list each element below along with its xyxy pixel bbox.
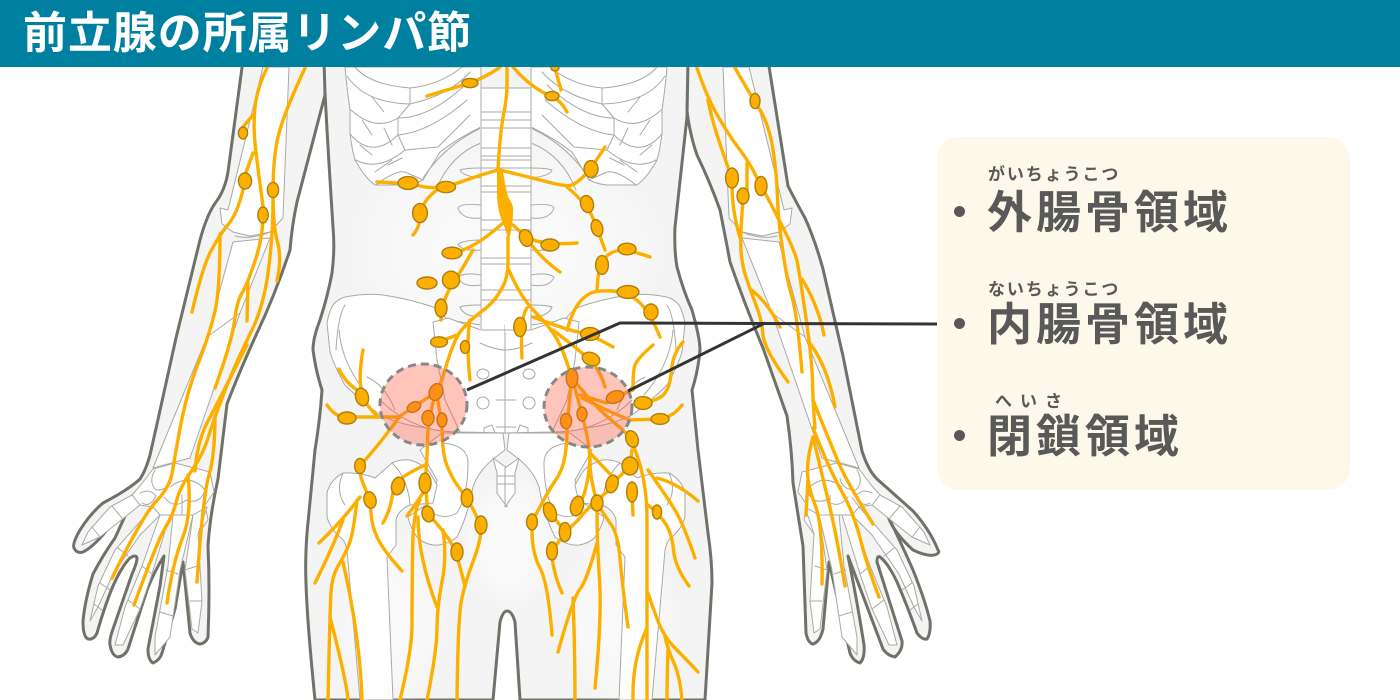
soft highlights on body: [330, 120, 680, 700]
panel: region list: [937, 137, 1350, 490]
title: 前立腺の所属リンパ節: [23, 9, 472, 58]
leader line: right region to label: [628, 323, 765, 391]
leader line: left region to label: [467, 323, 937, 390]
furigana: obturator: へいさ: [995, 392, 1070, 411]
bullet: [954, 318, 965, 329]
body silhouette: [74, 60, 939, 700]
highlighted region: right pelvic: [544, 367, 632, 447]
title bar: [0, 0, 1400, 67]
left arm lymph vessels and nodes: [112, 68, 305, 605]
label: internal iliac region: 内腸骨領域: [987, 298, 1232, 350]
left pelvic lymph vessels and nodes: [315, 350, 487, 700]
furigana: internal iliac: ないちょうこつ: [988, 280, 1120, 299]
furigana: external iliac: がいちょうこつ: [988, 165, 1120, 184]
torso lymph vessels and nodes: [377, 65, 660, 387]
list item: external iliac region: [954, 165, 1232, 238]
right pelvic lymph vessels and nodes: [527, 342, 698, 700]
bullet: [954, 430, 965, 441]
skeleton left half: [82, 67, 507, 700]
label: obturator region: 閉鎖領域: [987, 411, 1183, 462]
right arm lymph vessels and nodes: [697, 68, 879, 597]
list item: internal iliac region: [954, 280, 1232, 350]
highlighted region: left pelvic: [380, 364, 467, 445]
label: external iliac region: 外腸骨領域: [987, 186, 1232, 238]
skeleton right half: [505, 67, 930, 700]
bullet: [954, 206, 965, 217]
list item: obturator region: [954, 392, 1183, 462]
cisterna chyli: [497, 168, 513, 240]
